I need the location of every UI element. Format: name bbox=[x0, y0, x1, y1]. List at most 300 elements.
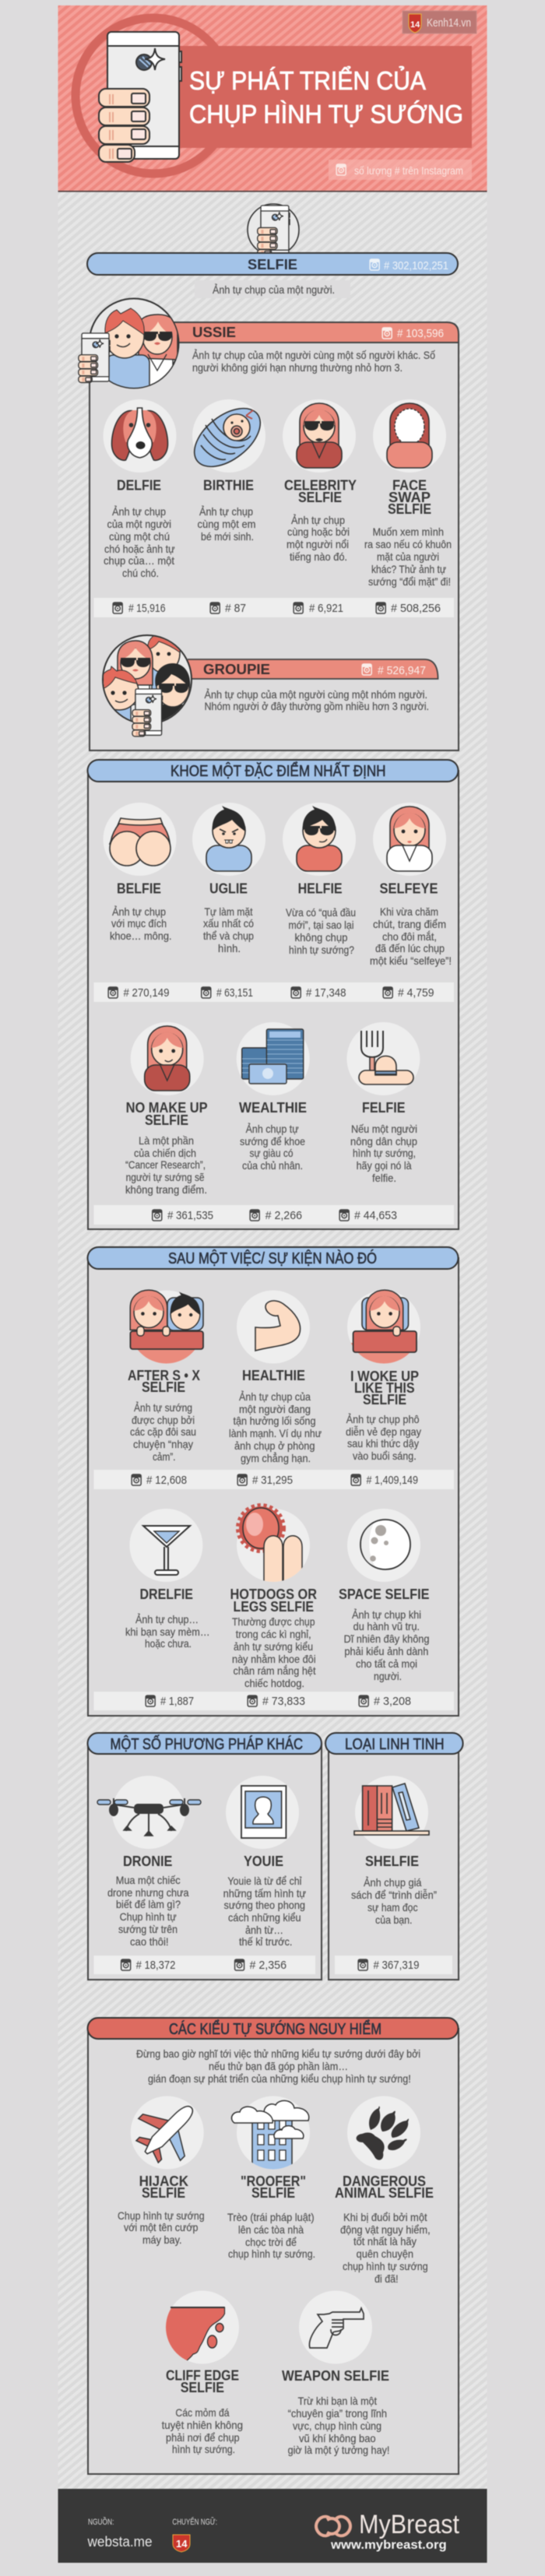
woke text: diễn vẻ đẹp ngay bbox=[346, 1425, 421, 1438]
main title bbox=[189, 66, 463, 128]
counts strip: row 2: # 44,653 bbox=[354, 1209, 397, 1222]
weapon text: vũ khí không bao bbox=[299, 2432, 376, 2444]
item: celebrity selfie bbox=[283, 399, 357, 563]
woke text: sau khi thức dậy bbox=[347, 1437, 419, 1450]
item: hijack selfie bbox=[118, 2086, 213, 2246]
selfie bar: SELFIE bbox=[248, 257, 297, 272]
wealthie text: sự giàu có bbox=[249, 1147, 294, 1159]
counts strip: row 2: # 1,887 bbox=[160, 1695, 194, 1708]
title panel bbox=[179, 46, 472, 148]
icon: martini glass bbox=[129, 1509, 202, 1582]
drelfie title: DRELFIE bbox=[140, 1587, 193, 1602]
counts strip: ussie row: # 6,921 bbox=[309, 602, 343, 615]
item: no make up selfie bbox=[125, 1022, 208, 1196]
item: cliff edge selfie bbox=[156, 2290, 243, 2455]
hotdogs text: ảnh tự sướng kiểu bbox=[234, 1640, 313, 1653]
ussie heading: # 103,596 bbox=[397, 327, 444, 340]
icon: money bbox=[237, 1022, 310, 1095]
icon: cliff bbox=[165, 2290, 239, 2363]
counts strip: row 1: # 17,348 bbox=[306, 986, 346, 1000]
item: roofer selfie bbox=[227, 2096, 315, 2260]
counts strip: ussie row: # 508,256 bbox=[391, 602, 441, 615]
groupie band: # 526,947 bbox=[378, 664, 426, 677]
helfie text: mới”, tại sao lại bbox=[288, 919, 353, 931]
panel: ussie bbox=[79, 299, 459, 750]
space text: Ảnh tự chụp khi bbox=[352, 1608, 421, 1621]
item: felfie bbox=[346, 1022, 420, 1184]
weapon title: WEAPON SELFIE bbox=[282, 2368, 389, 2384]
cliff text bbox=[162, 2406, 243, 2455]
face swap title: SELFIE bbox=[388, 501, 431, 517]
panel: show off a feature bbox=[87, 760, 459, 1229]
weapon text: giờ là một ý tưởng hay! bbox=[288, 2444, 389, 2456]
space text bbox=[344, 1608, 430, 1682]
ussie heading bbox=[192, 325, 444, 340]
roofer text: lên các tòa nhà bbox=[238, 2223, 304, 2236]
logo: Kenh14: Kenh14.vn bbox=[427, 16, 471, 30]
source credit: NGUỒN: bbox=[88, 2517, 114, 2527]
selfie description: Ảnh tự chụp của một người. bbox=[213, 283, 335, 296]
face swap text: sướng “đổi mặt” đi! bbox=[368, 575, 451, 588]
no make up title: NO MAKE UP bbox=[126, 1100, 208, 1116]
intro text: Đừng bao giờ nghĩ tới việc thử những kiểu tự sướng dưới đây bởi bbox=[136, 2047, 420, 2060]
no make up text: Là một phần bbox=[139, 1134, 194, 1147]
roofer text: chụp hình tự sướng. bbox=[228, 2247, 315, 2260]
hotdogs text bbox=[232, 1615, 316, 1689]
felfie text: felfie. bbox=[372, 1172, 396, 1184]
after text: Ảnh tự sướng bbox=[134, 1401, 192, 1414]
hijack title: SELFIE bbox=[142, 2185, 185, 2201]
weapon text: vực, chụp hình cùng bbox=[293, 2420, 382, 2432]
striped content background bbox=[58, 192, 487, 2489]
helfie text: Vừa có “quả đầu bbox=[286, 906, 356, 919]
counts strip: row 1: # 63,151 bbox=[216, 986, 253, 1000]
woke title: LIKE THIS bbox=[354, 1380, 415, 1396]
wealthie text: sướng để khoe bbox=[240, 1135, 305, 1147]
face swap title bbox=[388, 478, 431, 517]
face swap text: mặt của người bbox=[377, 550, 439, 563]
translator credit: CHUYỂN NGỮ: bbox=[172, 2517, 217, 2527]
counts strip: row 1: # 1,409,149 bbox=[366, 1474, 418, 1487]
belfie text: khoe… mông. bbox=[110, 930, 171, 942]
main title: CHỤP HÌNH TỰ SƯỚNG bbox=[189, 100, 463, 128]
counts strip: row 1 bbox=[93, 982, 454, 1002]
delfie text: Ảnh tự chụp bbox=[112, 505, 166, 518]
source credit: websta.me bbox=[87, 2534, 153, 2550]
weapon text bbox=[288, 2395, 389, 2456]
hotdogs text: này nhằm khoe đôi bbox=[232, 1653, 316, 1665]
after text: chuyện “nhạy bbox=[133, 1438, 193, 1450]
item: birthie bbox=[184, 397, 271, 543]
item: youie bbox=[223, 1776, 306, 1948]
drelfie text: khi bạn say mèm… bbox=[125, 1625, 210, 1638]
space text: phải kiểu ảnh dành bbox=[344, 1645, 428, 1657]
uglie text bbox=[203, 905, 254, 954]
healthie text bbox=[229, 1390, 322, 1464]
roofer text: chọc trời để bbox=[245, 2236, 297, 2248]
roofer title: "ROOFER" bbox=[241, 2174, 306, 2189]
counts strip: row 2 bbox=[93, 1692, 454, 1710]
panel: miscellaneous bbox=[325, 1733, 463, 1980]
birthie text bbox=[198, 505, 255, 543]
section heading bbox=[87, 2018, 458, 2039]
counts strip: row 1: # 4,759 bbox=[398, 986, 434, 1000]
delfie text: chụp của… một bbox=[104, 554, 174, 567]
no make up text: “Cancer Research”, bbox=[125, 1158, 206, 1171]
icon: groupie portrait bbox=[100, 634, 192, 736]
source credit bbox=[87, 2517, 153, 2550]
selfeye text: một kiểu “selfeye”! bbox=[370, 954, 452, 967]
intro text bbox=[136, 2047, 420, 2085]
uglie text: hình. bbox=[218, 942, 241, 954]
space text: người. bbox=[374, 1670, 402, 1682]
youie text: thế kỉ trước. bbox=[239, 1935, 292, 1948]
celebrity title: CELEBRITY bbox=[284, 478, 357, 494]
hijack text bbox=[118, 2209, 205, 2246]
roofer title: SELFIE bbox=[251, 2185, 295, 2201]
logo: Kenh14: 14 bbox=[410, 20, 420, 30]
section: selfie bbox=[87, 204, 458, 298]
icon: phone in hand bbox=[99, 32, 181, 162]
delfie text: cùng một chú bbox=[109, 530, 170, 543]
no make up text: người tự sướng sẽ bbox=[126, 1171, 205, 1183]
icon: selfeye bbox=[373, 803, 446, 876]
hotdogs title bbox=[230, 1587, 317, 1615]
icon: moon bbox=[347, 1509, 420, 1582]
item: face swap selfie bbox=[364, 399, 452, 588]
counts strip: # 18,372 bbox=[136, 1959, 175, 1972]
counts strip bbox=[93, 1956, 315, 1974]
cliff text: tuyệt nhiên không bbox=[162, 2419, 243, 2431]
item: uglie bbox=[192, 803, 265, 954]
uglie title: UGLIE bbox=[209, 881, 248, 897]
hijack text: máy bay. bbox=[142, 2233, 182, 2246]
healthie text: ảnh chụp ở phòng bbox=[234, 1439, 315, 1452]
logo: Kenh14 bbox=[403, 11, 476, 33]
ussie portrait bbox=[79, 299, 179, 394]
youie text: ảnh từ… bbox=[245, 1924, 283, 1936]
ussie description bbox=[192, 349, 435, 374]
shelfie text: của bạn. bbox=[375, 1914, 413, 1926]
item: dangerous animal selfie bbox=[335, 2096, 434, 2285]
section heading: SAU MỘT VIỆC/ SỰ KIỆN NÀO ĐÓ bbox=[168, 1249, 377, 1267]
youie text: cách những kiểu bbox=[228, 1911, 301, 1924]
icon: baby bbox=[184, 397, 271, 478]
translator credit: 14 bbox=[176, 2538, 188, 2550]
dangerous title bbox=[335, 2174, 434, 2201]
space title: SPACE SELFIE bbox=[339, 1587, 430, 1602]
youie text: những tấm hình tự bbox=[223, 1887, 306, 1899]
face swap title: FACE bbox=[392, 478, 427, 494]
hotdogs title: LEGS SELFIE bbox=[234, 1599, 314, 1615]
item: shelfie bbox=[351, 1776, 437, 1926]
delfie text: của một người bbox=[107, 518, 171, 530]
hijack title: HIJACK bbox=[139, 2174, 188, 2189]
belfie text: với mục đích bbox=[111, 917, 167, 930]
icon: revolver bbox=[299, 2290, 372, 2363]
item: helfie bbox=[283, 803, 356, 956]
after text: cảm”. bbox=[153, 1450, 176, 1463]
logo: MyBreast bbox=[316, 2510, 459, 2552]
dangerous text: tốt nhất là hãy bbox=[353, 2235, 417, 2247]
header banner bbox=[58, 5, 487, 192]
selfeye text: đã đến lúc chụp bbox=[375, 942, 445, 954]
counts strip: row 2: # 73,833 bbox=[262, 1695, 305, 1708]
face swap text: Muốn xem mình bbox=[372, 525, 444, 538]
face swap text: ra sao nếu có khuôn bbox=[364, 538, 452, 550]
shelfie text: sự ham đọc bbox=[367, 1901, 418, 1914]
helfie text: không chụp bbox=[294, 931, 348, 944]
after title bbox=[128, 1368, 200, 1395]
birthie text: cùng một em bbox=[198, 518, 255, 530]
counts strip: # 2,356 bbox=[249, 1959, 287, 1972]
counts strip: row 1: # 12,608 bbox=[146, 1474, 187, 1487]
cliff text: Các mỏm đá bbox=[175, 2406, 230, 2419]
section heading: MỘT SỐ PHƯƠNG PHÁP KHÁC bbox=[111, 1734, 303, 1753]
counts strip: row 2: # 3,208 bbox=[374, 1695, 411, 1708]
item: hotdogs or legs selfie bbox=[230, 1506, 317, 1689]
uglie text: Tự làm mặt bbox=[204, 905, 253, 918]
wealthie text bbox=[240, 1123, 305, 1172]
hijack title bbox=[139, 2174, 188, 2201]
after title: AFTER S • X bbox=[128, 1368, 200, 1383]
icon: fork and hat bbox=[346, 1022, 420, 1095]
section heading bbox=[87, 1733, 322, 1754]
ussie description: Ảnh tự chụp của một người cùng một số người khác. Số bbox=[192, 349, 435, 361]
healthie text: gym chẳng hạn. bbox=[241, 1451, 311, 1464]
celebrity text: cùng hoặc bởi bbox=[287, 525, 350, 538]
selfeye title: SELFEYE bbox=[380, 881, 438, 897]
dronie text bbox=[107, 1874, 189, 1948]
selfie bar: # 302,102,251 bbox=[384, 259, 448, 272]
counts strip: row 1 bbox=[93, 1470, 454, 1489]
space text: du hành vũ trụ. bbox=[353, 1620, 420, 1632]
felfie text: nông dân chụp bbox=[350, 1135, 417, 1147]
woke title: SELFIE bbox=[363, 1392, 406, 1407]
shelfie title: SHELFIE bbox=[365, 1854, 419, 1869]
dangerous title: ANIMAL SELFIE bbox=[335, 2185, 434, 2201]
delfie text: chó hoặc ảnh tự bbox=[104, 543, 174, 555]
groupie text: Ảnh tự chụp của một người cùng một nhóm người. bbox=[204, 688, 427, 701]
drelfie text: hoặc chưa. bbox=[145, 1637, 192, 1650]
icon: celebrity bbox=[283, 399, 356, 473]
healthie text: một người đang bbox=[239, 1403, 311, 1415]
weapon text: “chuyên gia” trong lĩnh bbox=[288, 2407, 387, 2420]
celebrity text: tiếng nào đó. bbox=[290, 550, 347, 563]
dangerous title: DANGEROUS bbox=[343, 2174, 426, 2189]
space text: Dĩ nhiên đây không bbox=[344, 1632, 430, 1645]
drelfie text bbox=[125, 1613, 210, 1650]
hotdogs text: chiếc hotdog. bbox=[244, 1677, 304, 1689]
icon: paw bbox=[347, 2096, 420, 2169]
item: belfie bbox=[103, 803, 176, 942]
icon: belfie bbox=[103, 803, 176, 876]
ussie description: người không giới hạn nhưng thường nhỏ hơn 3. bbox=[192, 361, 403, 374]
woke text: vào buổi sáng. bbox=[353, 1450, 417, 1462]
youie text bbox=[223, 1875, 306, 1948]
cliff text: phải nơi để chụp bbox=[166, 2431, 240, 2444]
section heading: KHOE MỘT ĐẶC ĐIỂM NHẤT ĐỊNH bbox=[171, 762, 386, 780]
woke text: Ảnh tự chụp phô bbox=[346, 1413, 420, 1425]
roofer text: Trèo (trái pháp luật) bbox=[227, 2211, 315, 2223]
translator credit bbox=[172, 2517, 217, 2552]
felfie text bbox=[350, 1123, 417, 1184]
dangerous text: quên chuyện bbox=[357, 2247, 413, 2260]
no make up text bbox=[125, 1134, 207, 1196]
hotdogs text: Thường được chụp bbox=[232, 1615, 315, 1628]
delfie text bbox=[104, 505, 174, 579]
icon: no make up bbox=[131, 1022, 204, 1095]
icon: uglie bbox=[192, 803, 265, 876]
groupie text bbox=[204, 688, 429, 712]
icon: polaroid bbox=[226, 1776, 299, 1849]
icon: face swap bbox=[373, 399, 446, 473]
space text: cho tất cả mọi bbox=[356, 1657, 417, 1670]
dronie text: cao thôi! bbox=[130, 1935, 168, 1948]
item: dronie bbox=[97, 1776, 201, 1948]
item: after sex selfie bbox=[125, 1290, 210, 1463]
selfeye text: chút, trang điểm bbox=[373, 918, 446, 930]
hijack text: với một tên cướp bbox=[124, 2221, 199, 2233]
counts strip: ussie row bbox=[93, 598, 454, 617]
after text: được chụp bởi bbox=[132, 1414, 195, 1426]
face swap title: SWAP bbox=[389, 490, 431, 505]
groupie text: Nhóm người ở đây thường gồm nhiều hơn 3 người. bbox=[204, 700, 429, 712]
item: wealthie bbox=[237, 1022, 310, 1172]
groupie band bbox=[188, 659, 438, 679]
dronie text: sướng từ trên bbox=[118, 1923, 178, 1935]
counts strip: row 1: # 270,149 bbox=[123, 986, 170, 1000]
shelfie text bbox=[351, 1876, 437, 1926]
dangerous text: đi đã! bbox=[374, 2272, 399, 2285]
icon: drone bbox=[97, 1776, 201, 1849]
belfie text bbox=[110, 905, 171, 942]
dangerous text bbox=[340, 2211, 431, 2285]
icon: woman in bed bbox=[346, 1290, 424, 1366]
hotdogs title: HOTDOGS OR bbox=[230, 1587, 317, 1602]
icon: books bbox=[354, 1776, 429, 1849]
counts strip: row 2: # 361,535 bbox=[167, 1209, 213, 1222]
dangerous text: Khi bị đuổi bởi một bbox=[343, 2211, 427, 2223]
icon: couple in bed bbox=[129, 1289, 205, 1364]
uglie text: thể và chụp bbox=[203, 930, 254, 942]
celebrity text: một người nổi bbox=[287, 538, 349, 550]
hotdogs text: trong các kì nghỉ, bbox=[236, 1628, 311, 1640]
birthie text: bé mới sinh. bbox=[201, 530, 254, 543]
intro text: gián đoạn sự phát triển của những kiểu chụp hình tự sướng! bbox=[148, 2072, 411, 2085]
icon: selfie phone bbox=[248, 204, 299, 256]
shelfie text: Ảnh chụp giá bbox=[364, 1876, 422, 1889]
woke title: I WOKE UP bbox=[350, 1369, 419, 1384]
counts strip: row 2: # 2,266 bbox=[265, 1209, 302, 1222]
section heading: CÁC KIỂU TỰ SƯỚNG NGUY HIỂM bbox=[169, 2020, 382, 2038]
icon: helfie bbox=[283, 803, 356, 876]
no make up text: của chiến dịch bbox=[134, 1147, 196, 1159]
logo: MyBreast: www.mybreast.org bbox=[330, 2539, 447, 2552]
dronie text: drone nhưng chưa bbox=[107, 1886, 189, 1899]
ussie heading: USSIE bbox=[192, 325, 236, 340]
icon: dog bbox=[103, 399, 176, 473]
header ring bbox=[76, 18, 231, 174]
panel: dangerous selfies bbox=[87, 2018, 459, 2474]
counts strip bbox=[335, 1956, 452, 1974]
legend bbox=[329, 160, 472, 180]
counts strip: row 1: # 31,295 bbox=[252, 1474, 293, 1487]
logo: MyBreast: MyBreast bbox=[359, 2510, 459, 2539]
dronie title: DRONIE bbox=[123, 1854, 172, 1869]
cliff title: SELFIE bbox=[181, 2380, 224, 2395]
dronie text: Mua một chiếc bbox=[116, 1874, 181, 1886]
hijack text: Chụp hình tự sướng bbox=[118, 2209, 205, 2222]
counts strip: ussie row: # 87 bbox=[225, 602, 246, 615]
after text bbox=[130, 1401, 196, 1463]
dangerous text: chụp hình tự sướng bbox=[343, 2260, 428, 2272]
icon: sun and legs bbox=[237, 1506, 310, 1588]
cliff text: hình tự sướng. bbox=[172, 2443, 235, 2455]
felfie text: hình tự sướng, bbox=[353, 1147, 416, 1159]
celebrity title bbox=[284, 478, 357, 505]
youie title: YOUIE bbox=[244, 1854, 283, 1869]
groupie band: GROUPIE bbox=[203, 662, 270, 677]
footer bbox=[58, 2489, 487, 2563]
icon: muscle arm bbox=[237, 1291, 310, 1364]
wealthie text: của chủ nhân. bbox=[242, 1159, 303, 1172]
face swap text bbox=[364, 525, 452, 588]
section heading bbox=[87, 1247, 458, 1269]
no make up title bbox=[126, 1100, 208, 1128]
celebrity title: SELFIE bbox=[298, 490, 342, 505]
counts strip: # 367,319 bbox=[374, 1959, 419, 1972]
belfie title: BELFIE bbox=[117, 881, 161, 897]
panel: other methods bbox=[87, 1733, 322, 1980]
felfie title: FELFIE bbox=[362, 1100, 405, 1116]
wealthie title: WEALTHIE bbox=[239, 1100, 307, 1116]
drelfie text: Ảnh tự chụp… bbox=[135, 1613, 199, 1625]
helfie title: HELFIE bbox=[298, 881, 343, 897]
helfie text bbox=[286, 906, 356, 956]
item: space selfie bbox=[339, 1509, 430, 1682]
icon: plane bbox=[125, 2086, 213, 2174]
item: selfeye bbox=[370, 803, 452, 967]
roofer title bbox=[241, 2174, 306, 2201]
face swap text: khác? Thử ảnh tự bbox=[371, 563, 446, 575]
healthie title: HEALTHIE bbox=[242, 1368, 305, 1383]
selfie description bbox=[195, 280, 350, 298]
section heading bbox=[325, 1733, 463, 1754]
woke title bbox=[350, 1369, 419, 1407]
shelfie text: sách để “trình diễn” bbox=[351, 1889, 437, 1901]
birthie title: BIRTHIE bbox=[203, 478, 254, 494]
cliff title: CLIFF EDGE bbox=[166, 2368, 239, 2384]
felfie text: Nếu một người bbox=[351, 1123, 417, 1135]
roofer text bbox=[227, 2211, 315, 2260]
item: healthie bbox=[229, 1291, 322, 1464]
healthie text: tận hưởng lối sống bbox=[234, 1415, 316, 1427]
item: weapon selfie bbox=[282, 2290, 389, 2456]
delfie title: DELFIE bbox=[117, 478, 161, 494]
wealthie text: Ảnh chụp tự bbox=[246, 1123, 299, 1135]
item: i woke up like this bbox=[346, 1290, 424, 1462]
helfie text: hình tự sướng? bbox=[289, 944, 354, 956]
item: delfie bbox=[103, 399, 176, 579]
uglie text: xấu nhất có bbox=[203, 917, 254, 930]
woke text bbox=[346, 1413, 421, 1462]
panel: after an event bbox=[87, 1247, 459, 1716]
selfeye text: Khi vừa chăm bbox=[380, 905, 438, 918]
hotdogs text: chân rám nắng hệt bbox=[234, 1664, 316, 1677]
section heading: LOẠI LINH TINH bbox=[345, 1736, 444, 1753]
dangerous text: động vật nguy hiểm, bbox=[340, 2223, 431, 2236]
